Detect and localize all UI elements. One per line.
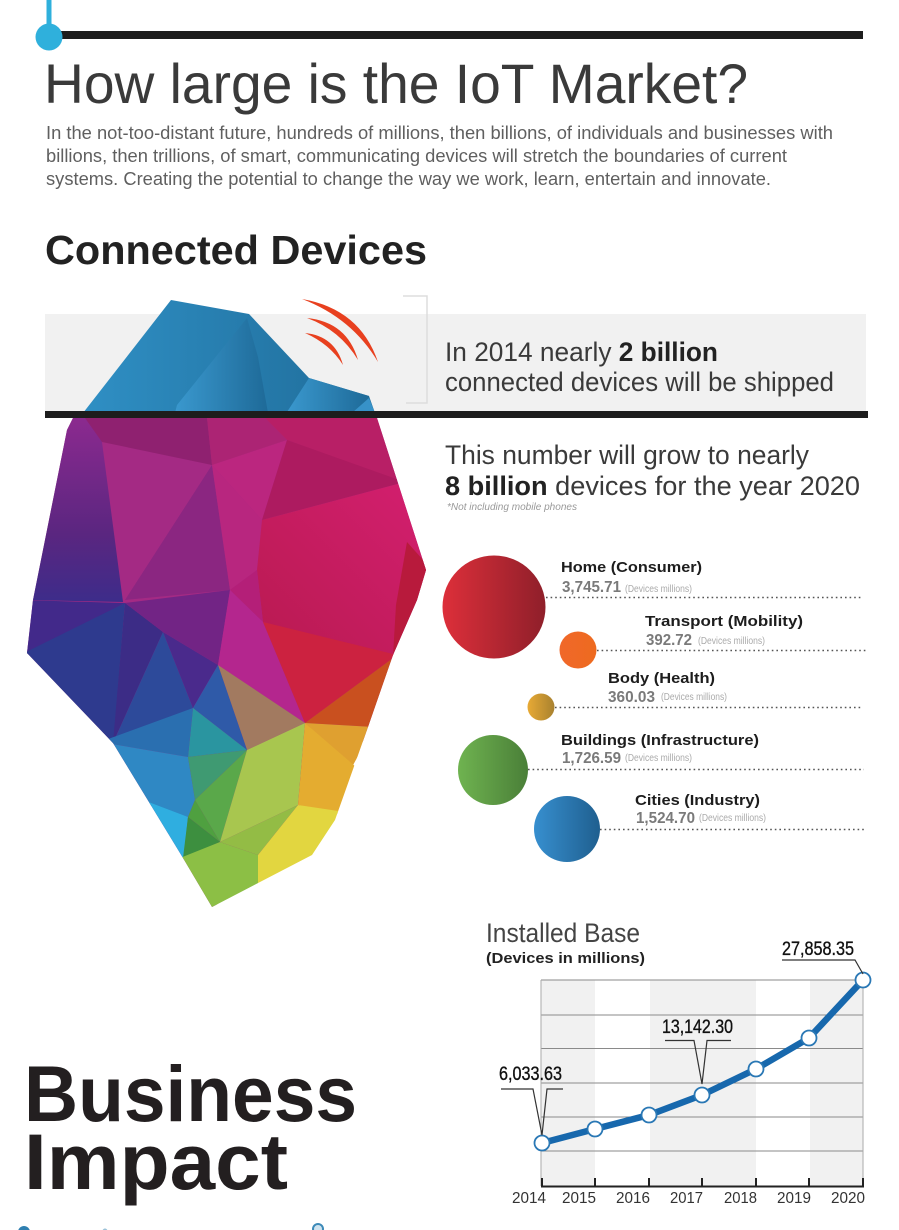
segment: home [442,556,862,658]
line chart: installed base: 2017 [670,1190,703,1207]
callout: 2014 shipments: In 2014 nearly 2 billion [445,337,718,367]
heading: installed base [486,918,645,967]
heading: installed base: Installed Base [486,918,640,948]
segment: buildings: Buildings (Infrastructure) [561,732,759,749]
callout: 2020 growth: 8 billion devices for the year 2020 [445,471,860,501]
callout: 2020 growth: This number will grow to nearly [445,440,809,470]
segment: home: (Devices millions) [625,584,692,595]
segment: cities [534,792,866,862]
line chart: installed base: 2014 [512,1190,546,1207]
heading: installed base: (Devices in millions) [486,950,645,967]
line chart: installed base: 13,142.30 [662,1017,733,1038]
intro paragraph [46,123,833,189]
segment: body: Body (Health) [608,670,715,687]
signal arcs icon [302,299,378,365]
segment: buildings: 1,726.59 [562,750,621,767]
heading: connected devices: Connected Devices [45,227,427,273]
iceberg body [20,410,432,912]
segment: transport: 392.72 [646,632,692,649]
line chart: installed base: 2019 [777,1190,811,1207]
footnote: *Not including mobile phones [447,502,577,513]
callout: 2020 growth [445,440,860,501]
heading: business impact: Impact [24,1117,288,1206]
intro paragraph: billions, then trillions, of smart, communicating devices will stretch the boundaries of current [46,146,787,166]
grey band behind iceberg tip [45,314,866,412]
callout: 2014 shipments [445,337,834,397]
intro paragraph: systems. Creating the potential to change the way we work, learn, entertain and innovate. [46,169,771,189]
intro paragraph: In the not-too-distant future, hundreds of millions, then billions, of individuals and businesses with [46,123,833,143]
line chart: installed base: 2020 [831,1190,865,1207]
segment: body: 360.03 [608,689,655,706]
iceberg tip [83,300,375,413]
top rule with cyan pin [36,0,863,50]
segment: transport: Transport (Mobility) [645,613,803,630]
segment: body [528,670,862,720]
segment: transport: (Devices millions) [698,636,765,647]
title: How large is the IoT Market? [44,52,748,115]
heading: business impact: Business [24,1049,357,1138]
segment: home: 3,745.71 [562,579,621,596]
callout: 2014 shipments: connected devices will be shipped [445,367,834,397]
segment: transport [560,613,866,668]
segment: buildings: (Devices millions) [625,753,692,764]
cropped icons at page bottom [18,1224,323,1230]
black waterline [45,411,868,418]
segment: cities: 1,524.70 [636,810,695,827]
segment: cities: (Devices millions) [699,813,766,824]
line chart: installed base: 2015 [562,1190,596,1207]
bracket [403,296,427,403]
line chart: installed base [499,939,870,1207]
line chart: installed base: 27,858.35 [782,939,854,960]
segment: buildings [458,732,864,805]
heading: business impact [24,1049,357,1206]
segment: home: Home (Consumer) [561,559,702,576]
segment: cities: Cities (Industry) [635,792,760,809]
segment: body: (Devices millions) [661,692,727,703]
line chart: installed base: 2016 [616,1190,650,1207]
line chart: installed base: 6,033.63 [499,1064,562,1085]
line chart: installed base: 2018 [724,1190,757,1207]
